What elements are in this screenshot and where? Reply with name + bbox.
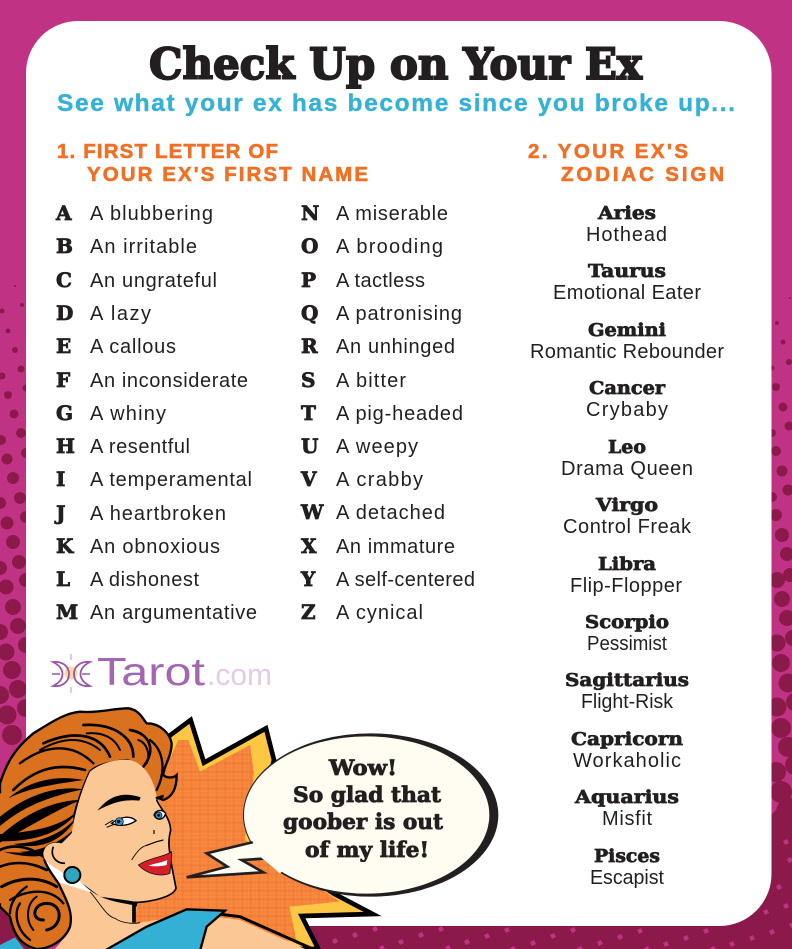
row T: A pig-headed <box>336 403 463 425</box>
row B: An irritable <box>90 236 197 258</box>
row M: An argumentative <box>90 602 257 624</box>
row N <box>301 201 448 225</box>
row G: G <box>56 401 73 425</box>
Scorpio <box>585 613 669 655</box>
row M: M <box>56 600 78 624</box>
row H: A resentful <box>90 436 190 458</box>
Leo: Leo <box>608 438 646 458</box>
speech bubble <box>187 733 498 897</box>
Capricorn: Capricorn <box>571 730 683 750</box>
woman illustration <box>0 708 315 949</box>
Virgo: Virgo <box>595 496 658 516</box>
zodiac list <box>530 204 724 889</box>
nose <box>146 830 163 846</box>
Cancer: Cancer <box>589 379 666 399</box>
row V: V <box>300 467 317 491</box>
row Y: Y <box>300 567 316 591</box>
row U: U <box>301 434 318 458</box>
row N: N <box>301 201 319 225</box>
row J: J <box>54 501 65 525</box>
logo: Tarot.com: Tarot <box>97 651 205 694</box>
logo: Tarot.com: .com <box>207 657 272 692</box>
row Z: Z <box>301 600 316 624</box>
earring <box>64 867 80 883</box>
row E: E <box>56 334 71 358</box>
Cancer <box>586 379 668 421</box>
row Q: A patronising <box>336 303 462 325</box>
Virgo <box>563 496 692 538</box>
row W: A detached <box>336 502 445 524</box>
Aries: Hothead <box>586 224 667 246</box>
Aries <box>586 204 667 246</box>
Aquarius: Aquarius <box>574 788 679 808</box>
row T: T <box>301 401 316 425</box>
Aries: Aries <box>597 204 656 224</box>
Virgo: Control Freak <box>563 516 692 538</box>
Pisces: Escapist <box>590 867 664 889</box>
row E <box>56 334 176 358</box>
row X: X <box>301 534 317 558</box>
row G <box>56 401 166 425</box>
row A: A <box>55 201 72 225</box>
heading: zodiac sign <box>528 140 724 186</box>
row Y: A self-centered <box>336 569 475 591</box>
Leo <box>561 438 693 480</box>
row D: D <box>56 301 73 325</box>
row F: F <box>56 368 70 392</box>
subtitle: See what your ex has become since you broke up... <box>57 90 735 117</box>
row W: W <box>300 500 324 524</box>
row D <box>56 301 151 325</box>
row P: P <box>301 268 316 292</box>
heading: first letter: 1. FIRST LETTER OF <box>57 140 278 163</box>
Scorpio: Pessimist <box>587 633 667 655</box>
body and neck <box>50 882 315 949</box>
row B <box>56 234 197 258</box>
comic burst <box>133 720 373 949</box>
icon: logo crescents <box>52 654 90 693</box>
row C: C <box>56 268 72 292</box>
row Z: A cynical <box>336 602 423 624</box>
Cancer: Crybaby <box>586 399 668 421</box>
blue dress <box>100 909 225 949</box>
row I: I <box>56 467 65 491</box>
row V: A crabby <box>336 469 423 491</box>
row R: An unhinged <box>336 336 455 358</box>
title: Check Up on Your Ex <box>149 40 642 90</box>
lips <box>138 852 172 875</box>
row U: A weepy <box>336 436 418 458</box>
row F: An inconsiderate <box>90 370 248 392</box>
Sagittarius: Flight-Risk <box>581 691 674 713</box>
row B: B <box>56 234 73 258</box>
Sagittarius: Sagittarius <box>565 671 689 691</box>
row K: K <box>56 534 74 558</box>
row H: H <box>56 434 75 458</box>
row H <box>56 434 190 458</box>
speech bubble text: of my life! <box>305 837 429 862</box>
row O: O <box>301 234 318 258</box>
speech bubble text <box>283 755 443 862</box>
row G: A whiny <box>90 403 166 425</box>
Aquarius: Misfit <box>602 808 652 830</box>
speech bubble text: So glad that <box>293 782 441 807</box>
Gemini: Romantic Rebounder <box>530 341 724 363</box>
row O: A brooding <box>336 236 443 258</box>
Capricorn <box>571 730 683 772</box>
row S: S <box>301 368 315 392</box>
letter list: A to M <box>54 201 257 624</box>
row P: A tactless <box>336 270 425 292</box>
row L <box>56 567 199 591</box>
heading: zodiac sign: ZODIAC SIGN <box>561 163 724 186</box>
speech bubble text: goober is out <box>283 809 443 834</box>
row S: A bitter <box>336 370 406 392</box>
row L: A dishonest <box>90 569 199 591</box>
row Q: Q <box>301 301 318 325</box>
speech bubble text: Wow! <box>328 755 397 780</box>
Gemini <box>530 321 724 363</box>
Taurus: Taurus <box>588 262 666 282</box>
heading: first letter: YOUR EX'S FIRST NAME <box>87 163 368 186</box>
Aquarius <box>574 788 679 830</box>
row X: An immature <box>336 536 455 558</box>
row O <box>301 234 443 258</box>
eyes <box>105 810 166 827</box>
row P <box>301 268 425 292</box>
row E: A callous <box>90 336 176 358</box>
Libra <box>570 555 682 597</box>
Taurus <box>553 262 701 304</box>
heading: zodiac sign: 2. YOUR EX'S <box>528 140 688 163</box>
eyebrow <box>97 795 164 811</box>
row C: An ungrateful <box>90 270 217 292</box>
logo: Tarot.com <box>52 651 272 694</box>
Leo: Drama Queen <box>561 458 693 480</box>
Pisces: Pisces <box>594 847 660 867</box>
row Z <box>301 600 423 624</box>
row I: A temperamental <box>90 469 252 491</box>
Pisces <box>590 847 664 889</box>
letter list: N to Z <box>300 201 475 624</box>
face <box>43 760 176 903</box>
Scorpio: Scorpio <box>585 613 669 633</box>
row L: L <box>56 567 70 591</box>
Capricorn: Workaholic <box>573 750 681 772</box>
row R: R <box>301 334 318 358</box>
Sagittarius <box>565 671 689 713</box>
Libra: Flip-Flopper <box>570 575 682 597</box>
Taurus: Emotional Eater <box>553 282 701 304</box>
heading: first letter <box>57 140 368 186</box>
row V <box>300 467 423 491</box>
row N: A miserable <box>336 203 448 225</box>
row W <box>300 500 445 524</box>
row J: A heartbroken <box>90 503 226 525</box>
hair <box>0 708 177 949</box>
row U <box>301 434 418 458</box>
row A: A blubbering <box>90 203 213 225</box>
row D: A lazy <box>90 303 151 325</box>
Libra: Libra <box>598 555 656 575</box>
row S <box>301 368 406 392</box>
row K: An obnoxious <box>90 536 220 558</box>
Gemini: Gemini <box>588 321 666 341</box>
